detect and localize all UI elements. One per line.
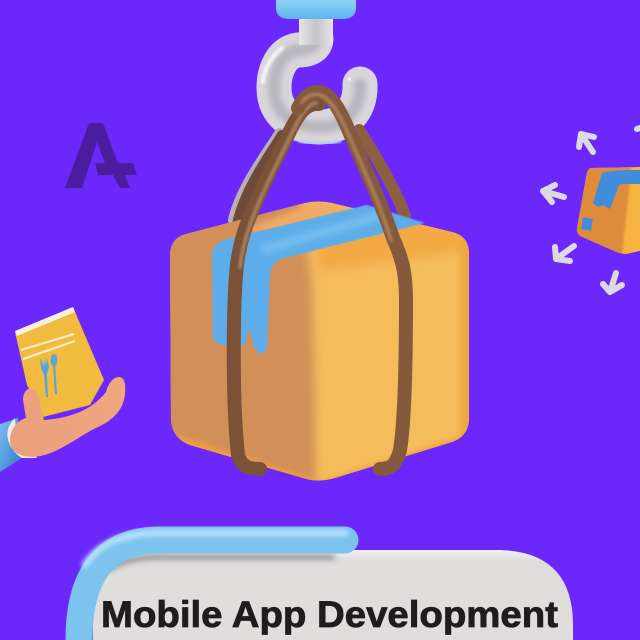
parcel box	[170, 202, 469, 480]
arrow down-left	[555, 246, 574, 261]
band highlight	[85, 533, 345, 565]
box bottom shading	[175, 433, 464, 480]
box right rim shading	[458, 236, 469, 438]
bag white top edge	[15, 307, 75, 336]
title card	[79, 533, 573, 640]
box base color	[165, 195, 475, 485]
arrows	[543, 128, 640, 292]
left front strap	[234, 104, 319, 469]
side box tape	[593, 170, 640, 209]
arrow up-left	[579, 134, 594, 152]
side box left face	[576, 167, 632, 254]
blue band	[79, 540, 345, 640]
front straps	[234, 92, 406, 469]
arrow down	[603, 273, 622, 292]
title: Mobile App Development	[101, 594, 558, 635]
arrow left	[543, 185, 564, 202]
box body	[170, 202, 469, 480]
box left face	[170, 203, 320, 480]
metal hook	[263, 38, 360, 144]
hook hanger cap	[276, 0, 356, 19]
hand	[10, 377, 125, 457]
box left rim light	[170, 245, 172, 420]
parcel tape	[212, 205, 425, 353]
right strap highlight	[302, 94, 391, 240]
arrow top right	[637, 128, 640, 129]
fork and spoon icon	[40, 354, 58, 397]
right front strap	[298, 92, 406, 469]
tape highlight	[262, 216, 380, 250]
hook stem	[299, 19, 333, 45]
left strap highlight	[240, 103, 316, 267]
hand holding food bag	[0, 307, 125, 472]
card panel	[93, 550, 573, 640]
cuff	[7, 418, 37, 458]
back straps	[234, 130, 405, 224]
bag lines	[21, 334, 75, 359]
food bag	[15, 307, 104, 417]
band shadow	[108, 557, 335, 570]
box top right shading	[318, 205, 475, 272]
sleeve	[0, 418, 22, 472]
side box with arrows	[543, 128, 640, 292]
side box label	[581, 217, 593, 231]
hook assembly	[263, 0, 360, 144]
side box base	[576, 167, 640, 254]
side box body	[576, 167, 640, 254]
logo	[65, 123, 137, 188]
box top left highlight	[252, 202, 342, 232]
